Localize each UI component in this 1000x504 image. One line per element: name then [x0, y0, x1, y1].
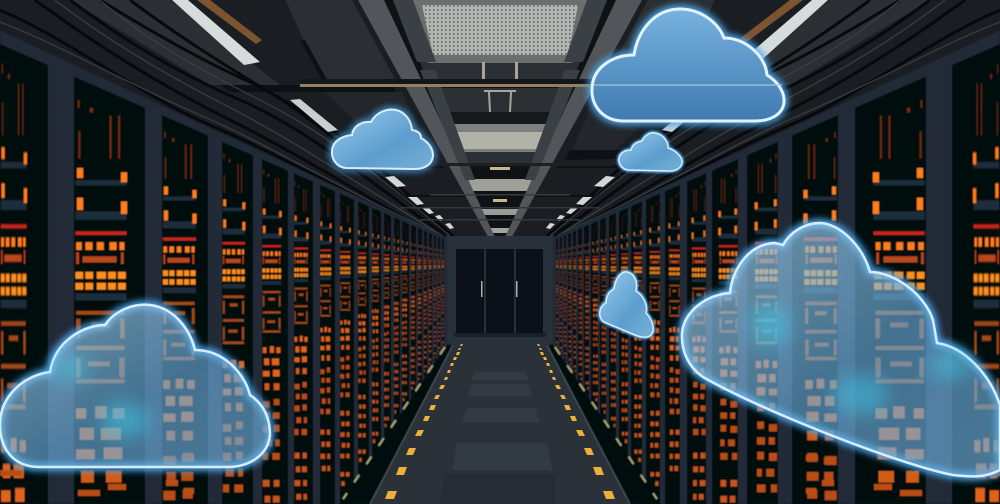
overhead rails [300, 79, 695, 220]
ceiling: right side [505, 0, 1000, 238]
floor [370, 345, 630, 504]
cloud: small upper right [619, 133, 682, 171]
ceiling vent: top [422, 5, 578, 55]
cloud: small upper left [332, 110, 433, 169]
floor lights: left [385, 344, 463, 499]
cloud: tiny tilted center right [600, 272, 653, 337]
floor lights: right [537, 344, 615, 499]
ceiling vent: middle [453, 132, 547, 149]
ceiling: left side [0, 0, 495, 238]
ceiling: central band [358, 0, 642, 237]
cloud: large tilted right [682, 223, 1000, 476]
cloud: large bottom left [0, 305, 270, 467]
back wall with doors [446, 236, 554, 346]
cloud: large top right [592, 9, 784, 121]
server racks: left wall [0, 30, 453, 504]
server racks: right wall [547, 30, 1000, 504]
